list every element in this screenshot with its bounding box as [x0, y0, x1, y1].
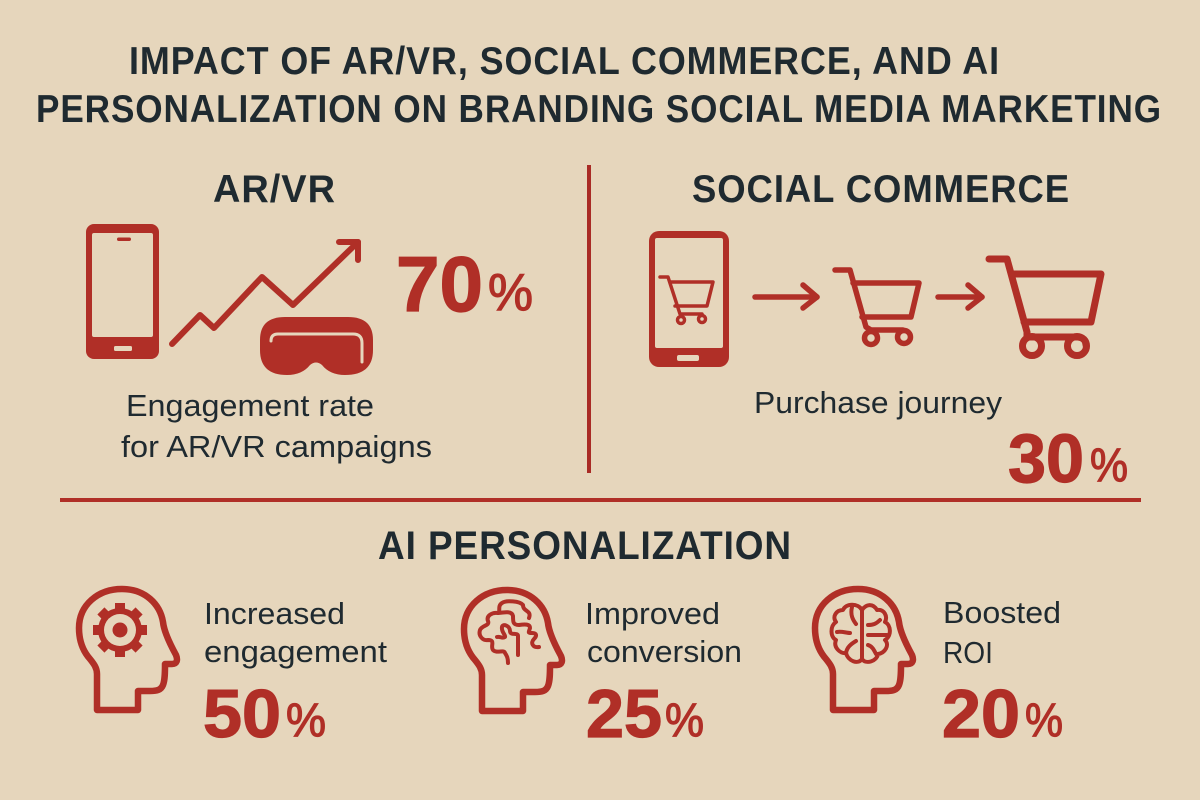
item: improved conversion [464, 590, 742, 752]
icon: smartphone [86, 224, 159, 359]
icon: medium cart [835, 270, 919, 344]
label: boosted ROI: Boosted [943, 595, 1061, 630]
caption: purchase journey: Purchase journey [754, 385, 1003, 420]
label: increased engagement [204, 596, 387, 669]
stat: 20%: % [1025, 693, 1063, 746]
stat: 70%: % [488, 264, 533, 322]
stat: 50%: % [286, 693, 326, 746]
stat: 25%: % [665, 693, 704, 746]
icon: phone with cart [649, 231, 729, 367]
label: improved conversion: Improved [585, 596, 720, 631]
label: boosted ROI: ROI [943, 635, 993, 670]
caption: engagement rate: Engagement rate [126, 388, 374, 423]
stat: 20% [942, 676, 1063, 752]
stat: 70%: 70 [396, 240, 483, 328]
stat: 50% [203, 676, 326, 752]
stat: 20%: 20 [942, 676, 1020, 752]
label: improved conversion: conversion [587, 634, 742, 669]
heading: AR/VR: AR/VR [213, 168, 336, 211]
stat: 25% [586, 676, 704, 752]
stat: 30%: 30 [1008, 420, 1084, 497]
title: IMPACT OF AR/VR, SOCIAL COMMERCE, AND AI [129, 40, 1000, 83]
arrow: phone to cart [755, 285, 817, 308]
stat: 30%: % [1090, 438, 1128, 491]
title [36, 40, 1162, 131]
caption: engagement rate: for AR/VR campaigns [121, 429, 432, 464]
caption: engagement rate [121, 388, 432, 464]
arrow: cart to larger cart [938, 285, 982, 308]
stat: 30% [1008, 420, 1128, 497]
heading: social commerce: SOCIAL COMMERCE [692, 168, 1070, 211]
stat: 50%: 50 [203, 676, 281, 752]
item: increased engagement [79, 589, 387, 752]
icon: head with gear [79, 589, 177, 710]
chart: rising trend arrow [172, 242, 358, 344]
stat: 25%: 25 [586, 676, 662, 752]
icon: VR headset [260, 317, 373, 375]
label: increased engagement: Increased [204, 596, 345, 631]
panel: AR/VR [86, 168, 533, 464]
icon: head with brain [815, 589, 913, 710]
label: boosted ROI [943, 595, 1061, 670]
icon: head with circuit brain [464, 590, 562, 711]
icon: large cart [989, 259, 1101, 356]
panel: social commerce [649, 168, 1128, 497]
stat: 70% [396, 240, 533, 328]
label: improved conversion [585, 596, 742, 669]
heading: AI personalization: AI PERSONALIZATION [378, 524, 792, 568]
label: increased engagement: engagement [204, 634, 387, 669]
item: boosted ROI [815, 589, 1063, 752]
panel: AI personalization [79, 524, 1063, 752]
